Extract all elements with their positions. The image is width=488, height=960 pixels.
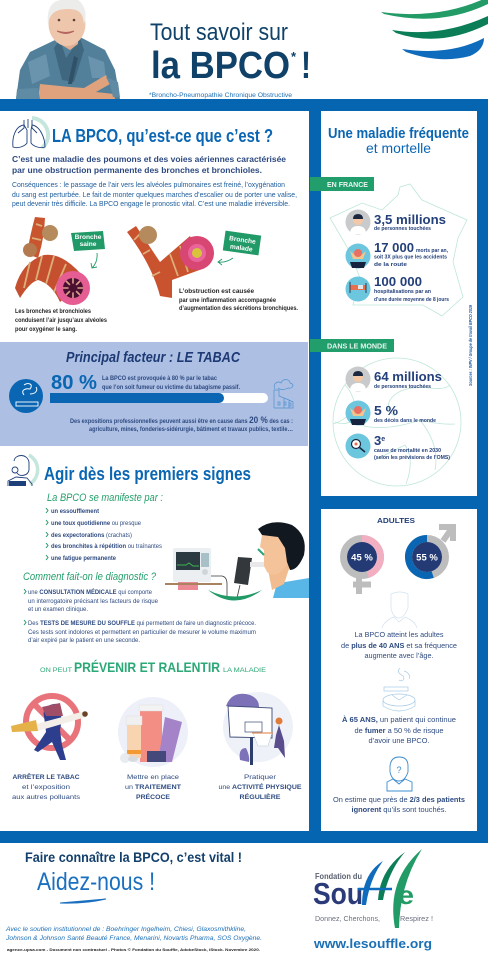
handwritten heading: diagnosis: Comment fait-on le diagnostic ? (23, 571, 157, 583)
caption: healthy bronchus: conduisent l’air jusqu’aux alvéoles (15, 317, 107, 324)
panel: tobacco (0, 342, 308, 446)
tag: in France (310, 177, 374, 191)
stat: third cause of death: e (381, 436, 385, 443)
stat: 100 000 hospitalisations: d’une durée moyenne de 8 jours (374, 297, 449, 303)
stat: 17 000 deaths: soit 3X plus que les accidents (374, 254, 447, 260)
caption: physical activity: Pratiquer (244, 774, 277, 781)
icon: person with question mark: ? (396, 765, 402, 775)
text: over 40: de plus de 40 ANS et sa fréquence (341, 641, 457, 650)
stat: 17 000 deaths: 17 000 (374, 240, 414, 255)
text: unaware patients: On estime que près de 2/3 des patients (333, 795, 465, 804)
symptom list (46, 508, 163, 562)
logo swooshes (381, 0, 488, 59)
caption: diseased bronchus (179, 288, 298, 312)
caption: diseased bronchus: par une inflammation accompagnée (179, 297, 276, 304)
credits: agence-upsa.com - Document non contractuel - Photos © Fondation du Souffle, AdobeStock, iStock. Novembre 2020. (7, 947, 260, 952)
arrow: to healthy bronchus (91, 253, 97, 268)
symptom list: une fatigue permanente (51, 555, 116, 562)
icon: adult person (382, 592, 417, 628)
symptom list: des expectorations (crachats) (51, 532, 132, 539)
logo: Fondation du Souffle: Sou (313, 876, 363, 911)
stat description: La BPCO est provoquée à 80 % par le tabac (102, 375, 218, 382)
consequences text (12, 180, 297, 208)
caption: treatment: un TRAITEMENT (125, 784, 181, 791)
caption: physical activity: RÉGULIÈRE (240, 792, 281, 801)
section: act at first signs (8, 455, 309, 644)
panel: main left column (0, 111, 309, 831)
stat: 100 000 hospitalisations: 100 000 (374, 274, 422, 289)
caption: physical activity (218, 774, 302, 801)
sponsors (5, 926, 262, 942)
heading: LA MALADIE (223, 667, 267, 674)
tag: diseased bronchus: malade (229, 243, 253, 254)
title (150, 19, 311, 87)
footnote: *Broncho-Pneumopathie Chronique Obstructive (149, 93, 293, 99)
illustration: healthy bronchus (15, 217, 90, 305)
consequences text: Conséquences : le passage de l’air vers les alvéoles pulmonaires est freiné, l’oxygénation (12, 180, 285, 189)
logo: Fondation du Souffle: Fondation du (315, 872, 362, 881)
title: la BPCO (151, 45, 290, 87)
stat: 3.5 million: de personnes touchées (374, 226, 431, 232)
heading: et mortelle (366, 140, 431, 156)
text: at 65: de fumer a 50 % de risque (354, 726, 444, 735)
caption: healthy bronchus: pour oxygéner le sang. (15, 326, 77, 333)
logo: Fondation du Souffle (313, 849, 433, 928)
chart: men 55 % (408, 527, 453, 576)
heading: Une maladie fréquente (328, 125, 469, 142)
tag: diseased bronchus: Bronche (229, 235, 256, 246)
text: at 65 (342, 715, 456, 745)
illustration: physical activity (223, 692, 293, 765)
map: world globe (333, 358, 461, 486)
handwritten: help us: Aidez-nous ! (37, 868, 155, 896)
stat: third cause of death (374, 433, 450, 461)
illustration: treatment (118, 697, 188, 767)
text: over 40: augmente avec l’âge. (364, 651, 434, 660)
text: at 65: À 65 ANS, un patient qui continue (342, 715, 456, 724)
heading: PRÉVENIR ET RALENTIR (74, 659, 220, 675)
stat: 64 million: 64 millions (374, 369, 442, 384)
stat: 3.5 million: 3,5 millions (374, 212, 446, 227)
definition: C’est une maladie des poumons et des voies aériennes caractérisée (12, 155, 286, 164)
definition (12, 155, 286, 175)
stat: 100 000 hospitalisations: hospitalisations par an (374, 289, 432, 295)
title: * (291, 49, 297, 64)
stat icon: deaths (346, 244, 370, 268)
stat: 80 %: 80 % (51, 372, 97, 394)
heading: Agir dès les premiers signes (44, 464, 251, 484)
panel: adults (321, 509, 477, 831)
caption: treatment: Mettre en place (127, 774, 179, 781)
stat: 17 000 deaths (374, 240, 448, 268)
header (16, 0, 488, 99)
icon: factory (274, 380, 293, 408)
illustration: diseased bronchus (127, 226, 214, 298)
illustration: no smoking (11, 696, 88, 760)
consequences text: du sang est perturbée. Le fait de monter quelques marches d’escalier ou de porter une valise, (12, 190, 297, 199)
heading: main factor: Principal facteur : LE TABAC (66, 349, 241, 366)
stat: third cause of death: (selon les prévisions de l’OMS) (374, 455, 450, 461)
stat: 5 %: des décès dans le monde (374, 418, 436, 424)
consequences text: peut devenir très difficile. La BPCO engage le pronostic vital. C’est une maladie irréversible. (12, 199, 290, 208)
symptom list: des bronchites à répétition ou traînantes (51, 543, 163, 550)
handwritten: help us (37, 868, 155, 903)
caption: stop smoking: ARRÊTER LE TABAC (12, 772, 80, 781)
heading (328, 125, 469, 156)
stat: 100 000 hospitalisations (374, 274, 449, 303)
occupational exposure text (70, 415, 293, 433)
occupational exposure text: Des expositions professionnelles peuvent aussi être en cause dans 20 % des cas : (70, 415, 293, 426)
caption: diseased bronchus: L’obstruction est causée (179, 288, 254, 295)
stat icon: deaths worldwide (346, 400, 370, 426)
icon: cigarette (9, 379, 43, 413)
caption: stop smoking (12, 772, 81, 801)
stat: 5 %: 5 % (374, 403, 398, 418)
stat icon: people affected (346, 210, 370, 234)
logo: Fondation du Souffle: Respirez ! (400, 916, 433, 923)
section: what is COPD (12, 118, 298, 333)
caption: diseased bronchus: d’augmentation des sécrétions bronchiques. (179, 305, 298, 312)
sponsors: Johnson & Johnson Santé Beauté France, Menarini, Novartis Pharma, SOS Oxygène. (5, 935, 262, 942)
text: over 40: La BPCO atteint les adultes (354, 630, 444, 639)
tag: diseased bronchus (223, 231, 261, 255)
sponsors: Avec le soutien institutionnel de : Boehringer Ingelheim, Chiesi, Glaxosmithkline, (5, 926, 246, 933)
diagnosis text: un interrogatoire précisant les facteurs de risque (28, 598, 158, 605)
caption: healthy bronchus (15, 308, 107, 333)
photo: smiling man with crossed arms (16, 0, 120, 99)
section: adults (333, 516, 465, 814)
chart: women 45 %: 45 % (351, 552, 373, 564)
stat description: que l’on soit fumeur ou victime du tabagisme passif. (102, 384, 240, 391)
title: Tout savoir sur (150, 19, 288, 46)
logo: Fondation du Souffle: Donnez, Cherchons, (315, 916, 380, 923)
stat: 17 000 deaths: de la route (374, 262, 407, 268)
diagnosis text: Des TESTS DE MESURE DU SOUFFLE qui permettent de faire un diagnostic précoce. (28, 620, 256, 627)
symptom list: un essoufflement (51, 508, 100, 515)
tag: healthy bronchus (71, 231, 105, 251)
caption: treatment (125, 774, 181, 801)
map: France outline (330, 184, 467, 316)
heading: ON PEUT (40, 667, 72, 674)
stat: 5 % (374, 403, 436, 424)
diagnosis text: et un examen clinique. (28, 606, 88, 613)
tag: healthy bronchus: Bronche (75, 234, 102, 241)
definition: par une obstruction permanente des bronches et bronchioles. (12, 166, 262, 175)
stat description (102, 375, 240, 391)
caption: physical activity: une ACTIVITÉ PHYSIQUE (218, 782, 302, 791)
title: ! (301, 45, 311, 87)
icon: person with question mark (387, 757, 412, 791)
icon: lungs (13, 118, 48, 148)
stat: third cause of death: cause de mortalité en 2030 (374, 448, 441, 454)
text: unaware patients (333, 795, 465, 814)
chart: women 45 % (344, 538, 380, 594)
diagnosis text (24, 587, 256, 644)
panel: frequent disease (321, 111, 477, 496)
text: at 65: d’avoir une BPCO. (368, 736, 430, 745)
text: over 40 (341, 630, 457, 660)
stat icon: magnifying glass (346, 434, 370, 458)
heading: LA BPCO, qu’est-ce que c’est ? (52, 126, 273, 146)
icon: ashtray with cigarette (383, 668, 415, 711)
caption: stop smoking: et l’exposition (22, 784, 70, 791)
tag: worldwide: DANS LE MONDE (327, 344, 387, 350)
arrow: to diseased bronchus (218, 258, 233, 265)
caption: healthy bronchus: Les bronches et bronchioles (15, 308, 91, 315)
occupational exposure text: agriculture, mines, fonderies-sidérurgie, bâtiment et travaux publics, textile… (89, 426, 293, 433)
footer (5, 849, 433, 952)
call to action heading: Faire connaître la BPCO, c’est vital ! (25, 849, 242, 865)
tag: worldwide (310, 339, 394, 352)
blue frame background (0, 99, 488, 843)
caption: stop smoking: aux autres polluants (12, 794, 81, 801)
stat: 17 000 deaths: morts par an, (416, 248, 448, 254)
diagnosis text: d’air expiré par le patient en une seconde. (28, 637, 140, 644)
source note: Sources : INPV / Groupe de travail BPCO 2019 (468, 305, 473, 386)
progress bar (50, 393, 268, 403)
logo: Fondation du Souffle: e (398, 880, 414, 910)
handwritten heading: symptoms: La BPCO se manifeste par : (47, 492, 163, 504)
illustration: spirometry test (165, 522, 309, 600)
caption: treatment: PRÉCOCE (136, 792, 171, 801)
text: unaware patients: ignorent qu’ils sont touchés. (352, 805, 446, 814)
icon: coughing person (8, 455, 38, 486)
section: prevent and slow (11, 659, 302, 801)
diagnosis text: Ces tests sont indolores et permettent en particulier de mesurer le volume maximum (28, 629, 256, 636)
symptom list: une toux quotidienne ou presque (51, 520, 141, 527)
diagnosis text: une CONSULTATION MÉDICALE qui comporte (28, 587, 152, 596)
heading: ADULTES (377, 516, 415, 525)
chart: men 55 %: 55 % (416, 552, 438, 564)
stat icon: people affected worldwide (346, 366, 370, 392)
tag: healthy bronchus: saine (80, 241, 97, 248)
stat icon: hospital bed (346, 276, 370, 302)
stat: 64 million: de personnes touchées (374, 384, 431, 390)
section: frequent and deadly (310, 125, 473, 486)
tag: in France: EN FRANCE (327, 182, 368, 189)
stat: third cause of death: 3 (374, 433, 381, 448)
website: www.lesouffle.org (313, 936, 432, 951)
